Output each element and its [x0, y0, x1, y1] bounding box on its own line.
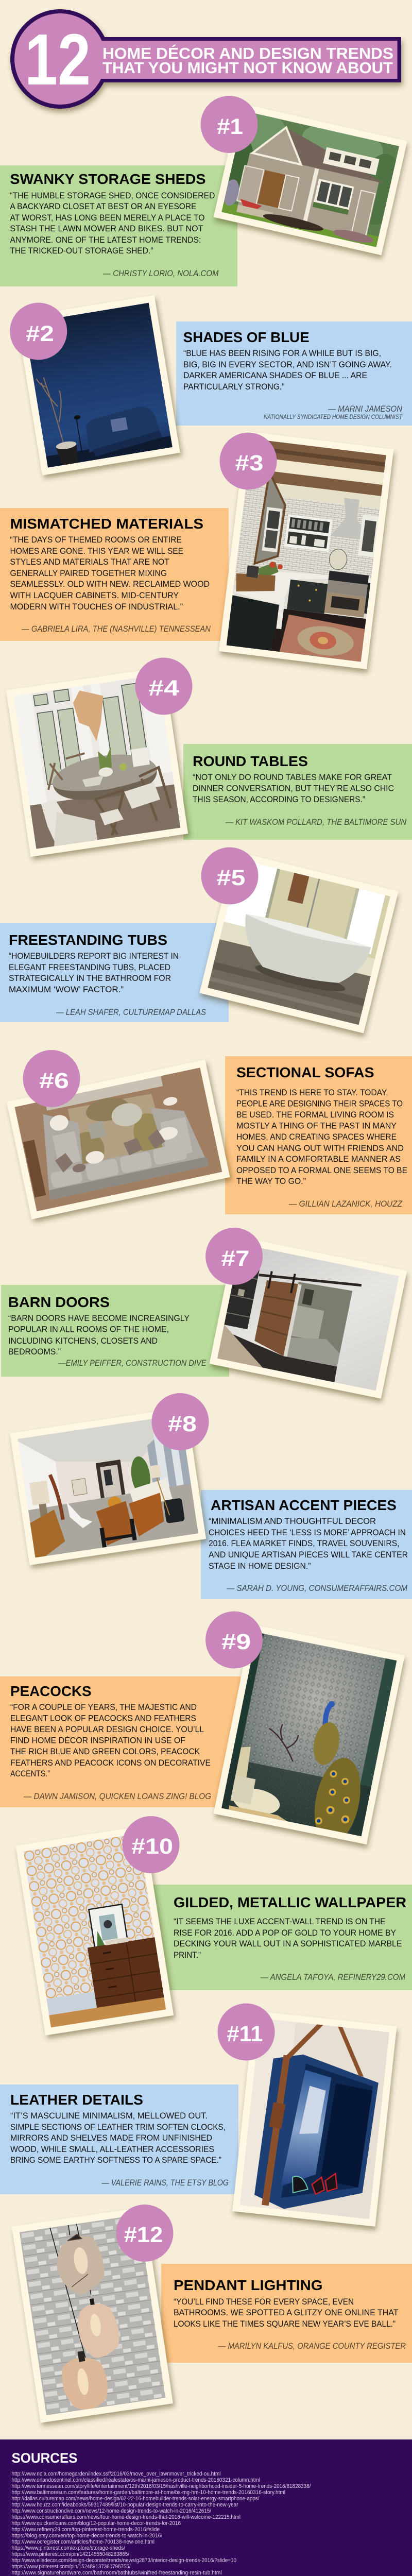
sources list: http://dallas.culturemap.com/news/home-design/02-22-16-homebuilder-trends-solar-energy-smartphone-apps/ [11, 2496, 260, 2502]
quote: STYLES AND MATERIALS THAT ARE NOT [10, 557, 169, 567]
panel: leather details quote [0, 2084, 238, 2194]
sources list: https://blog.etsy.com/en/top-home-decor-trends-to-watch-in-2016/ [11, 2533, 163, 2539]
badge: #6: #6 [39, 1069, 69, 1093]
section 12: pendant lighting [12, 2205, 412, 2423]
sources list: http://www.signaturehardware.com/bathroom/bathtubs/winifred-freestanding-resin-tub.html [11, 2570, 221, 2576]
quote: THE RICH BLUE AND GREEN COLORS, PEACOCK [10, 1747, 200, 1756]
panel: barn doors quote [1, 1285, 229, 1377]
quote: A BACKYARD CLOSET AT BEST OR AN EYESORE [10, 201, 196, 211]
photo: kitchen [219, 431, 393, 669]
sources list [11, 2471, 311, 2576]
heading: SHADES OF BLUE [183, 329, 310, 345]
badge: #10 [123, 1816, 179, 1873]
badge: #4 [135, 657, 193, 715]
quote: 2016. FLEA MARKET FINDS, TRAVEL SOUVENIRS, [209, 1538, 400, 1548]
sources list: http://www.constructiondive.com/news/12-home-design-trends-to-watch-in-2016/412615/ [11, 2508, 212, 2514]
heading: MISMATCHED MATERIALS [10, 516, 203, 532]
sources list: http://www.orlandosentinel.com/classified/realestate/os-marni-jameson-product-trends-20160321-column.html [11, 2477, 260, 2483]
badge: #6 [23, 1050, 80, 1107]
quote: YOU CAN HANG OUT WITH FRIENDS AND [236, 1143, 404, 1153]
quote [8, 1313, 190, 1357]
sources list: https://www.pinterest.com/pin/152489137360796755/ [11, 2564, 131, 2570]
panel: storage sheds quote [0, 165, 237, 286]
quote: BIG, BIG IN EVERY SECTOR, AND ISN’T GOING AWAY. [183, 360, 392, 369]
quote: “BLUE HAS BEEN RISING FOR A WHILE BUT IS BIG, [183, 348, 381, 358]
heading: PEACOCKS [10, 1683, 92, 1699]
quote: POPULAR IN ALL ROOMS OF THE HOME, [8, 1324, 169, 1334]
photo: storage shed [205, 100, 412, 256]
quote: RISE FOR 2016. ADD A POP OF GOLD TO YOUR HOME BY [174, 1928, 396, 1938]
badge: #1: #1 [217, 114, 243, 139]
attribution: — LEAH SHAFER, CULTUREMAP DALLAS [56, 1007, 207, 1017]
badge: #11 [217, 2003, 275, 2061]
section 4: round tables [6, 657, 412, 857]
quote: STAGE IN HOME DESIGN.” [209, 1561, 311, 1571]
heading: PENDANT LIGHTING [174, 2277, 322, 2293]
title badge outline [10, 9, 401, 109]
quote: HOMES ARE GONE. THIS YEAR WE WILL SEE [10, 546, 183, 556]
badge: #5: #5 [216, 866, 245, 890]
quote [9, 951, 179, 994]
title text: HOME DÉCOR AND DESIGN TRENDS [102, 44, 393, 62]
quote: “NOT ONLY DO ROUND TABLES MAKE FOR GREAT [193, 772, 392, 782]
sources list: https://www.pinterest.com/explore/storage-sheds/ [11, 2545, 126, 2551]
badge: #12 [116, 2205, 173, 2262]
heading: SWANKY STORAGE SHEDS [10, 171, 205, 187]
title number: 12 [25, 19, 91, 100]
photo: navy blue room [16, 295, 180, 476]
quote: DINNER CONVERSATION, BUT THEY’RE ALSO CHIC [193, 783, 394, 793]
panel: metallic wallpaper quote [153, 1885, 412, 1990]
panel: pendant lighting quote [161, 2264, 412, 2363]
photo: leather strap shelf [232, 2011, 397, 2227]
quote: LOOKS LIKE THE TIMES SQUARE NEW YEAR’S EVE BALL.” [174, 2319, 396, 2329]
panel: round tables quote [183, 744, 412, 840]
panel: artisan accent pieces quote [201, 1490, 412, 1599]
heading: GILDED, METALLIC WALLPAPER [174, 1894, 406, 1910]
quote: “BARN DOORS HAVE BECOME INCREASINGLY [8, 1313, 190, 1323]
quote [236, 1088, 407, 1186]
badge: #7: #7 [221, 1246, 249, 1271]
quote: AT WORST, HAS LONG BEEN MERELY A PLACE TO [10, 213, 204, 223]
badge: #8 [151, 1393, 209, 1450]
panel: peacocks quote [0, 1676, 241, 1807]
sources list: https://www.consumeraffairs.com/news/four-home-design-trends-that-2016-will-welcome-122215.html [11, 2514, 241, 2520]
quote: ELEGANT FREESTANDING TUBS, PLACED [9, 962, 170, 972]
heading: BARN DOORS [8, 1294, 110, 1310]
quote: ANYMORE. ONE OF THE LATEST HOME TRENDS: [10, 235, 201, 245]
section 3: mismatched materials [0, 431, 393, 669]
section 11: leather details [0, 2003, 397, 2227]
sources list: http://www.refinery29.com/top-pinterest-home-trends-2016#slide [11, 2527, 160, 2533]
quote: PARTICULARLY STRONG.” [183, 382, 285, 392]
sources list: http://www.houzz.com/ideabooks/59317489/list/10-popular-design-trends-to-carry-into-the-new-year [11, 2502, 238, 2508]
section 9: peacocks [0, 1612, 405, 1851]
quote: STASH THE LAWN MOWER AND BIKES. BUT NOT [10, 224, 203, 233]
quote: “HOMEBUILDERS REPORT BIG INTEREST IN [9, 951, 179, 961]
quote: “THE HUMBLE STORAGE SHED, ONCE CONSIDERED [10, 191, 215, 200]
quote: FEATHERS AND PEACOCK ICONS ON DECORATIVE [10, 1758, 211, 1768]
quote: THE TRICKED-OUT STORAGE SHED.” [10, 246, 153, 256]
attribution: — MARNI JAMESON [328, 404, 403, 414]
photo: gold marble wallpaper [16, 1826, 174, 2036]
badge: #1 [201, 96, 258, 153]
heading: ARTISAN ACCENT PIECES [211, 1497, 397, 1513]
quote: “IT SEEMS THE LUXE ACCENT-WALL TREND IS ON THE [174, 1917, 385, 1926]
attribution: — GABRIELA LIRA, THE (NASHVILLE) TENNESSEAN [21, 624, 211, 634]
quote [10, 535, 210, 612]
panel: freestanding tubs quote [0, 923, 229, 1022]
badge: #11: #11 [227, 2022, 263, 2046]
photo: living room with artisan pieces [10, 1407, 206, 1565]
photo: sectional sofa [7, 1060, 230, 1219]
panel: shades of blue quote [176, 321, 412, 426]
quote [10, 2111, 226, 2165]
attribution: — VALERIE RAINS, THE ETSY BLOG [101, 2178, 229, 2188]
heading: LEATHER DETAILS [10, 2092, 143, 2108]
badge: #7 [205, 1228, 263, 1285]
quote: BEDROOMS.” [8, 1347, 61, 1357]
quote: “MINIMALISM AND THOUGHTFUL DECOR [209, 1516, 376, 1526]
quote: GENERALLY PAIRED TOGETHER MIXING [10, 568, 167, 578]
sources list: http://www.tennessean.com/story/life/entertainment/12th/2016/03/15/nashville-neighborhood-insider-5-home-trends-2016/81828338/ [11, 2483, 311, 2489]
badge: #9: #9 [221, 1630, 251, 1654]
section 1: swanky storage sheds [0, 96, 412, 286]
quote: MOSTLY A THING OF THE PAST IN MANY [236, 1121, 397, 1130]
quote: DECKING YOUR WALL OUT IN A SOPHISTICATED MARBLE [174, 1939, 402, 1948]
title [10, 9, 401, 109]
badge: #12: #12 [124, 2223, 163, 2247]
quote: FIND HOME DÉCOR INSPIRATION IN USE OF [10, 1735, 185, 1745]
quote: THIS SEASON, ACCORDING TO DESIGNERS.” [193, 794, 365, 804]
sources list: http://www.baltimoresun.com/features/home-garden/baltimore-at-home/bs-mg-hm-10-home-trends-20160316-story.html [11, 2489, 285, 2496]
section 10: gilded metallic wallpaper [16, 1816, 412, 2036]
badge: #2 [10, 303, 67, 360]
badge: #3: #3 [235, 451, 264, 476]
section 8: artisan accent pieces [10, 1393, 412, 1599]
sources list: http://www.nola.com/homegarden/index.ssf/2016/03/move_over_lawnmover_tricked-ou.html [11, 2471, 220, 2477]
attribution: — GILLIAN LAZANICK, HOUZZ [288, 1199, 403, 1209]
quote: ELEGANT LOOK OF PEACOCKS AND FEATHERS [10, 1714, 196, 1723]
section 6: sectional sofas [7, 1050, 412, 1219]
quote: FAMILY IN A COMFORTABLE MANNER AS [236, 1154, 401, 1164]
quote: PRINT.” [174, 1950, 201, 1960]
quote: “THE DAYS OF THEMED ROOMS OR ENTIRE [10, 535, 182, 545]
badge: #3 [219, 433, 277, 489]
sources list: https://www.pinterest.com/pin/14214555048283865/ [11, 2551, 130, 2557]
footer panel: sources [0, 2439, 412, 2576]
quote [183, 348, 392, 392]
quote [193, 772, 394, 804]
badge: #8: #8 [168, 1412, 197, 1436]
title text: THAT YOU MIGHT NOT KNOW ABOUT [102, 59, 393, 77]
quote: STRATEGICALLY IN THE BATHROOM FOR [9, 973, 171, 983]
sources list: http://www.elledecor.com/design-decorate/trends/news/g2873/interior-design-trends-2016/?slide=10 [11, 2557, 236, 2564]
panel: mismatched materials quote [0, 508, 229, 641]
badge: #10: #10 [131, 1834, 173, 1859]
quote: BRING SOME EARTHY SOFTNESS TO A SPARE SPACE.” [10, 2155, 221, 2165]
badge: #9 [205, 1612, 263, 1668]
photo: dining room [6, 667, 188, 857]
quote: SIMPLE SECTIONS OF LEATHER TRIM SOFTEN CLOCKS, [10, 2122, 226, 2132]
section 2: shades of blue [10, 295, 412, 476]
quote: “FOR A COUPLE OF YEARS, THE MAJESTIC AND [10, 1702, 197, 1712]
quote [10, 1702, 211, 1778]
quote: HOMES, AND CREATING SPACES WHERE [236, 1132, 397, 1142]
quote: MIRRORS AND SHELVES MADE FROM UNFINISHED [10, 2133, 212, 2143]
quote: MAXIMUM ‘WOW’ FACTOR.” [9, 985, 124, 994]
quote: SEAMLESSLY. OLD WITH NEW. RECLAIMED WOOD [10, 579, 210, 589]
badge: #4: #4 [148, 676, 179, 701]
quote: THE WAY TO GO.” [236, 1176, 306, 1186]
photo: barn door [210, 1236, 407, 1399]
section 5: freestanding tubs [0, 847, 399, 1033]
sources list: http://www.quickenloans.com/blog/12-popular-home-decor-trends-for-2016 [11, 2520, 181, 2527]
section 7: barn doors [1, 1228, 407, 1399]
sources heading: SOURCES [11, 2450, 77, 2466]
heading: ROUND TABLES [193, 753, 308, 769]
quote: DARKER AMERICANA SHADES OF BLUE ... ARE [183, 370, 367, 380]
quote: HAVE BEEN A POPULAR DESIGN CHOICE. YOU’LL [10, 1724, 204, 1734]
attribution: —EMILY PEIFFER, CONSTRUCTION DIVE [58, 1358, 207, 1368]
quote [174, 2297, 399, 2329]
quote: WITH LACQUER CABINETS. MID-CENTURY [10, 590, 179, 600]
quote: ACCENTS.” [10, 1769, 50, 1778]
quote: “THIS TREND IS HERE TO STAY. TODAY, [236, 1088, 388, 1097]
photo: freestanding tub [199, 851, 399, 1033]
panel: sectional sofas quote [225, 1056, 412, 1214]
badge: #5 [201, 847, 259, 905]
quote: “YOU’LL FIND THESE FOR EVERY SPACE, EVEN [174, 2297, 354, 2307]
heading: SECTIONAL SOFAS [236, 1064, 374, 1080]
attribution: — CHRISTY LORIO, NOLA.COM [102, 268, 219, 278]
sources list: http://www.ocregister.com/articles/home-700138-new-one.html [11, 2539, 154, 2545]
quote [10, 191, 215, 256]
photo: peacock wallpaper [212, 1624, 405, 1851]
quote: “IT’S MASCULINE MINIMALISM, MELLOWED OUT. [10, 2111, 208, 2121]
quote: BE USED. THE FORMAL LIVING ROOM IS [236, 1110, 394, 1120]
quote: INCLUDING KITCHENS, CLOSETS AND [8, 1336, 158, 1346]
badge: #2: #2 [26, 321, 54, 346]
quote: WOOD, WHILE SMALL, ALL-LEATHER ACCESSORIES [10, 2144, 214, 2154]
quote: BATHROOMS. WE SPOTTED A GLITZY ONE ONLINE THAT [174, 2308, 399, 2317]
heading: FREESTANDING TUBS [9, 932, 167, 948]
attribution: — DAWN JAMISON, QUICKEN LOANS ZING! BLOG [23, 1791, 211, 1801]
quote [209, 1516, 408, 1571]
quote [174, 1917, 402, 1960]
quote: MODERN WITH TOUCHES OF INDUSTRIAL.” [10, 602, 183, 612]
attribution [264, 404, 403, 420]
title text [102, 44, 393, 77]
photo: glass pendants [12, 2207, 173, 2423]
